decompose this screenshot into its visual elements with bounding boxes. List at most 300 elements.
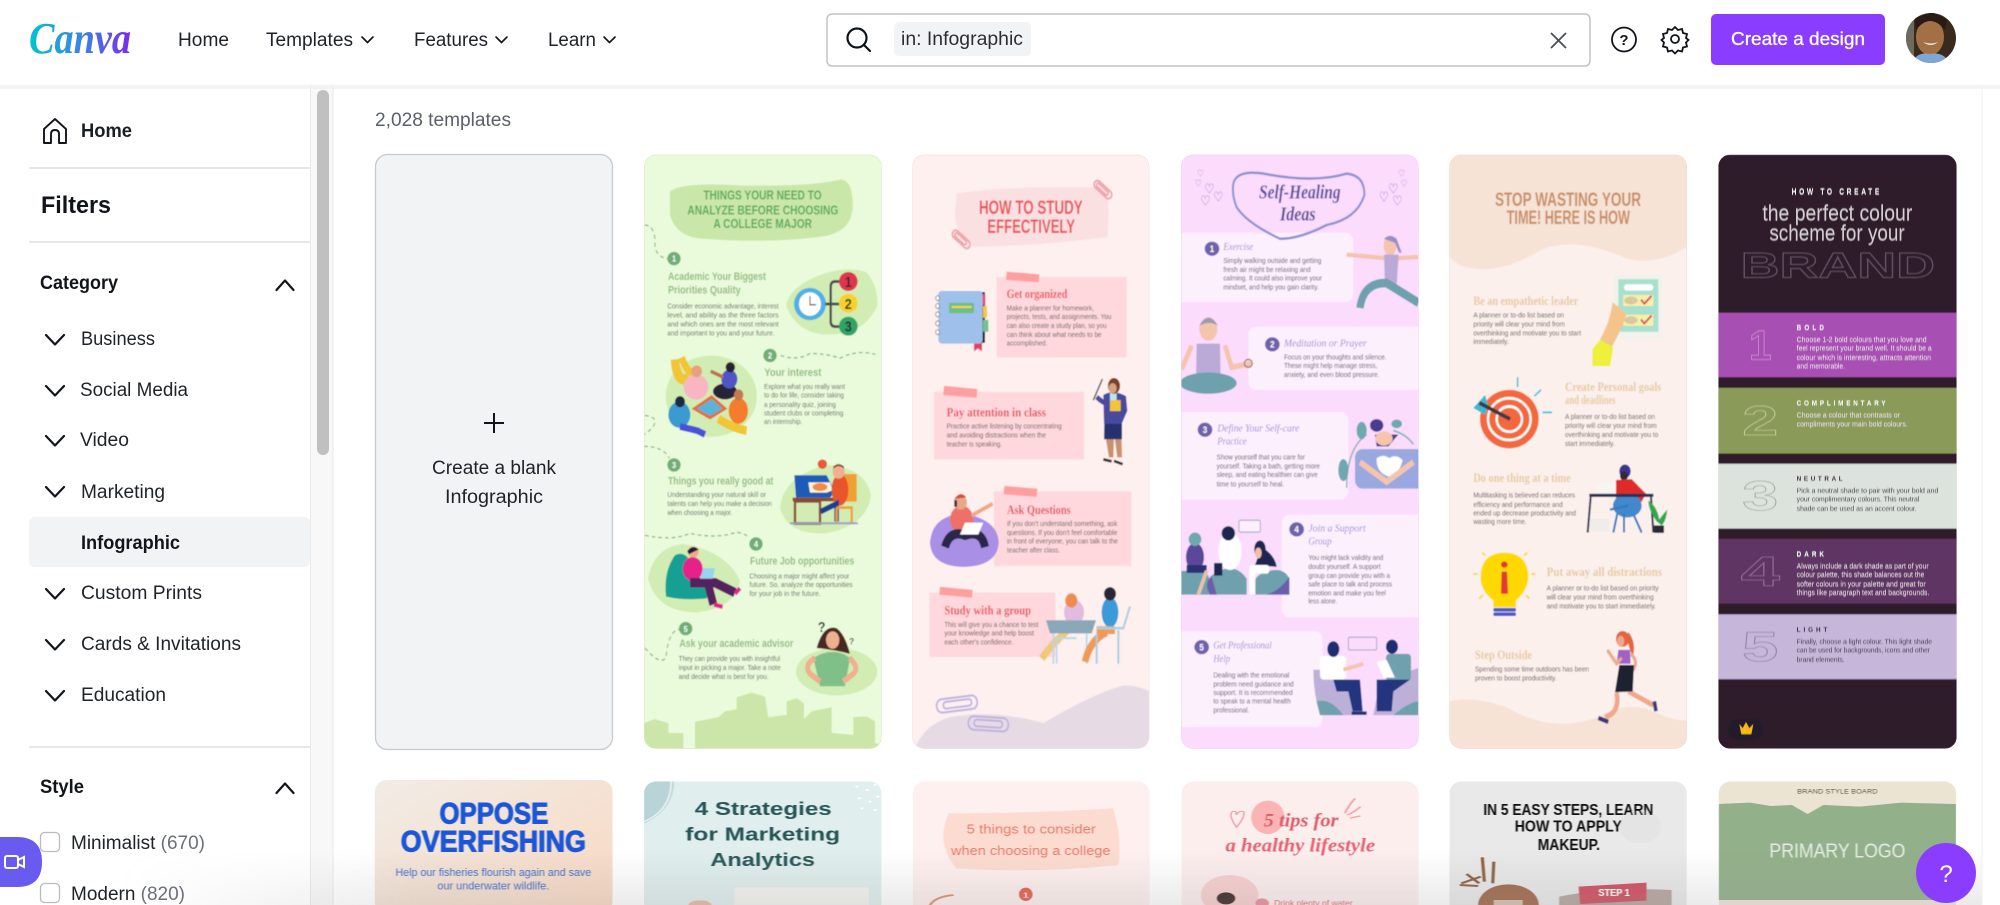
- heading: style: Style: [40, 777, 84, 798]
- icon: help: ?: [1619, 32, 1629, 49]
- illustration: meditation pose: [1180, 317, 1252, 394]
- idea 1: exercise: 1: [1210, 243, 1214, 254]
- illustration: student at a desk: [780, 459, 871, 533]
- tip: goals and deadlines: start immediately.: [1565, 441, 1615, 448]
- icon: camera: [5, 856, 24, 868]
- strip 2: complimentary: 2: [1742, 398, 1778, 445]
- title text: [687, 190, 838, 228]
- top navigation bar: [0, 13, 2000, 89]
- tip: step outside: Spending some time outdoors has been: [1475, 666, 1589, 674]
- strip 4: dark: softer colours in your palette and great for: [1797, 581, 1927, 588]
- idea 4: support group: doubt yourself. A support: [1308, 563, 1381, 571]
- title: scheme for your: [1769, 221, 1905, 246]
- card: brand style board: [1719, 781, 1956, 905]
- title: EFFECTIVELY: [987, 215, 1075, 237]
- tip: goals and deadlines: and deadlines: [1565, 392, 1616, 407]
- tip: goals and deadlines: priority will clear your mind from: [1565, 423, 1657, 430]
- card: oppose overfishing: our underwater wildlife.: [437, 879, 549, 892]
- bottom fade overlay: [0, 850, 1982, 905]
- icon: light bulb: [1473, 553, 1535, 616]
- logo: Canva: Canva: [29, 14, 131, 63]
- skyline: [644, 693, 882, 749]
- tip: step outside: proven to boost productivity.: [1475, 675, 1557, 683]
- step 2: student clubs or completing: [764, 410, 843, 418]
- idea 4: support group: Join a Support: [1308, 523, 1366, 535]
- card: oppose overfishing: OPPOSE: [439, 797, 548, 830]
- step 2: [666, 349, 845, 437]
- step 2: Explore what you really want: [764, 384, 845, 391]
- tip: study with a group: [929, 587, 1130, 664]
- illustration: two students at a table: [1042, 587, 1130, 664]
- hearts: ♡: [1392, 193, 1402, 209]
- idea 5: professional help: support. It is recommended: [1213, 690, 1293, 697]
- idea 2: meditation: [1180, 317, 1387, 394]
- idea 5: professional help: Get Professional: [1213, 640, 1272, 652]
- sidebar: filters: [29, 119, 310, 905]
- icon: checklist in hand: [1592, 274, 1663, 366]
- idea 5: professional help: [1194, 637, 1419, 715]
- hearts: ♡: [1398, 169, 1405, 180]
- dashed connectors: [644, 225, 875, 660]
- idea 4: support group: safe place to talk and process: [1308, 581, 1392, 589]
- tip: one thing at a time: efficiency and performance and: [1473, 501, 1563, 509]
- tip: study with a group: each other's confidence.: [944, 639, 1013, 647]
- title text: ANALYZE BEFORE CHOOSING: [687, 202, 838, 218]
- card: oppose overfishing: Help our fisheries flourish again and save: [396, 866, 591, 878]
- tip: pay attention: [934, 378, 1127, 464]
- idea 2: meditation: Meditation or Prayer: [1283, 338, 1367, 350]
- tip: get organized: can think about what needs to be: [1007, 331, 1102, 339]
- title: the perfect colour: [1762, 201, 1913, 226]
- idea 5: professional help: professional.: [1213, 707, 1249, 715]
- idea 1: exercise: mindset, and help you gain clarity.: [1223, 284, 1319, 292]
- card: choosing a college: 1: [1023, 891, 1029, 900]
- filter: infographic selected: [29, 517, 310, 567]
- step 1: Priorities Quality: [668, 285, 741, 297]
- idea 3: self-care practice: time to yourself to heal.: [1217, 481, 1284, 488]
- title: Ideas: [1279, 203, 1316, 225]
- idea 4: support group: You might lack validity and: [1308, 555, 1383, 562]
- title: HOW TO CREATE: [1792, 187, 1879, 197]
- card: apply makeup: IN 5 EASY STEPS, LEARN: [1483, 802, 1653, 819]
- strip 2: complimentary: Choose a colour that contrasts or: [1797, 412, 1901, 420]
- step 4: [648, 537, 855, 612]
- nav item: Learn: Learn: [548, 30, 596, 51]
- strip 3: neutral: NEUTRAL: [1797, 476, 1843, 483]
- icon: clock with priorities: 2: [845, 295, 852, 312]
- strip 5: light: brand elements.: [1797, 656, 1845, 664]
- title: [951, 179, 1113, 250]
- badge: crown: [1728, 719, 1763, 740]
- tip: ask questions: If you don't understand something, ask: [1007, 521, 1118, 528]
- step 3: talents can help you make a decision: [667, 501, 772, 508]
- strip 1: bold: [1718, 313, 1957, 377]
- idea 3: self-care practice: [1198, 419, 1432, 489]
- tip: empathetic leader: immediately.: [1473, 339, 1509, 346]
- illustration: self-hug: [1338, 418, 1419, 490]
- illustration: student on a beanbag: [930, 494, 999, 567]
- strip 1: bold: and memorable.: [1797, 363, 1845, 371]
- strip 4: dark: 4: [1741, 549, 1781, 596]
- step 5: They can provide you with insightful: [679, 656, 780, 663]
- step 4: 4: [754, 540, 759, 549]
- illustration: group talking: [1181, 520, 1289, 595]
- tip: step outside: [1475, 631, 1656, 722]
- idea 5: professional help: Help: [1212, 653, 1230, 665]
- template count: 2,028 templates: [375, 110, 511, 131]
- strip 4: dark: colour palette, this shade balances out the: [1797, 572, 1925, 579]
- tip: get organized: projects, tests, and assignments. You: [1007, 314, 1111, 321]
- idea 3: self-care practice: yourself. Taking a bath, getting more: [1217, 463, 1320, 471]
- strip 3: neutral: your complimentary colours. This neutral: [1797, 496, 1920, 504]
- nav item: Templates: Templates: [266, 30, 353, 51]
- heading: style: [40, 777, 294, 798]
- strip 1: bold: colour which is interesting, attracts attention: [1797, 354, 1931, 362]
- tip: study with a group: your knowledge and help boost: [944, 630, 1034, 638]
- icon: plus: [484, 413, 504, 433]
- illustration: yoga lunge: [1347, 236, 1419, 308]
- tip: goals and deadlines: A planner or to-do list based on: [1565, 414, 1655, 421]
- step 3: [666, 458, 871, 533]
- strip 3: neutral: Pick a neutral shade to pair with your bold and: [1797, 488, 1939, 495]
- step 1: and which ones are the most relevant: [667, 321, 779, 329]
- tip: pay attention: Practice active listening by concentrating: [947, 423, 1062, 431]
- idea 1: exercise: [1205, 236, 1419, 308]
- card: college major infographic: [644, 155, 882, 749]
- illustration: woman on a beanbag with laptop: [648, 544, 740, 612]
- button: create a design: [1711, 14, 1885, 65]
- tip: ask questions: [930, 486, 1131, 567]
- title: BRAND: [1741, 246, 1935, 285]
- illustration: woman with question marks: [796, 618, 877, 695]
- step 5: input in picking a major. Take a note: [679, 665, 781, 672]
- card: oppose overfishing: OVERFISHING: [401, 825, 586, 858]
- idea 2: meditation: 2: [1270, 339, 1275, 350]
- category filter list: [29, 273, 310, 706]
- filter: marketing: Marketing: [81, 482, 165, 503]
- tip: put away distractions: and motivate you to start immediately.: [1547, 603, 1656, 611]
- tip: empathetic leader: A planner or to-do list based on: [1473, 312, 1564, 320]
- filter: custom prints: Custom Prints: [81, 583, 202, 604]
- strip 1: bold: BOLD: [1797, 325, 1824, 332]
- style filter list: [40, 777, 294, 905]
- nav item: Home: Home: [178, 30, 229, 51]
- illustration: teacher: [1093, 378, 1127, 464]
- icon: home: [44, 119, 66, 143]
- idea 2: meditation: These might help manage stress,: [1284, 363, 1377, 370]
- illustration: runner: [1598, 631, 1656, 722]
- user avatar: [1906, 12, 1956, 64]
- card: brand style board: BRAND STYLE BOARD: [1797, 787, 1878, 795]
- tip: put away distractions: A planner or to-do list based on priority: [1547, 585, 1659, 593]
- search chip: in: Infographic: [901, 29, 1023, 50]
- card: marketing analytics: for Marketing: [685, 824, 840, 845]
- icon: search: [848, 28, 870, 51]
- title blob: [670, 180, 853, 241]
- icon: clock with priorities: 3: [845, 318, 852, 335]
- title: [1495, 188, 1641, 229]
- tip: step outside: Step Outside: [1475, 647, 1533, 662]
- strip 3: neutral: [1718, 464, 1957, 529]
- tip: ask questions: questions. If you don't feel comfortable: [1007, 529, 1117, 537]
- strip 5: light: [1718, 614, 1957, 679]
- icon: notebook: [936, 291, 988, 351]
- illustration: woman with question marks: ?: [818, 618, 826, 635]
- tip: empathetic leader: [1473, 274, 1663, 366]
- idea 5: professional help: to speak to a mental health: [1213, 698, 1291, 706]
- tip: pay attention: and avoiding distractions when the: [947, 432, 1046, 439]
- tip: get organized: [936, 272, 1127, 357]
- strip 5: light: Finally, choose a light colour. This light shade: [1797, 639, 1932, 646]
- strip 1: bold: Choose 1-2 bold colours that you love and: [1797, 337, 1927, 344]
- title text: A COLLEGE MAJOR: [713, 216, 812, 231]
- card: self-healing ideas: [1173, 155, 1432, 749]
- icon: target with arrow: [1473, 377, 1552, 448]
- strip 5: light: LIGHT: [1797, 627, 1828, 634]
- strip 4: dark: things like paragraph text and backgrounds.: [1797, 590, 1930, 597]
- bottom wave with paperclips: [915, 686, 1149, 749]
- strip 5: light: 5: [1742, 624, 1778, 671]
- step 1: and important to you and your future.: [667, 330, 775, 337]
- button: create a design: Create a design: [1731, 29, 1865, 49]
- tip: get organized: accomplished.: [1007, 340, 1047, 348]
- strip 5: light: can be used for backgrounds, icons and other: [1797, 647, 1931, 655]
- tip: get organized: can also create a study plan, so you: [1007, 323, 1107, 330]
- step 4: Future Job opportunities: [750, 556, 855, 568]
- strip 3: neutral: 3: [1742, 473, 1778, 520]
- step 2: a personality quiz, joining: [764, 401, 836, 409]
- step 2: an internship.: [764, 418, 802, 426]
- illustration: man at desk with plant: [1588, 465, 1667, 533]
- step 4: Choosing a major might affect your: [749, 573, 850, 581]
- card: marketing analytics: 4 Strategies: [695, 799, 832, 820]
- hearts: ♡: [1197, 169, 1204, 180]
- title: Self-Healing: [1259, 181, 1341, 203]
- tip: goals and deadlines: [1473, 377, 1662, 448]
- step 1: Consider economic advantage, interest: [667, 303, 779, 311]
- strip 4: dark: [1718, 539, 1957, 604]
- filter: infographic selected: Infographic: [81, 533, 180, 554]
- hearts: ♡: [1213, 188, 1223, 205]
- heading: category: Category: [40, 273, 118, 294]
- card: create a blank infographic: [376, 154, 612, 750]
- tip: one thing at a time: Do one thing at a time: [1473, 470, 1571, 485]
- tip: put away distractions: will clear your mind from overthinking: [1546, 594, 1654, 602]
- card: stop wasting your time: [1449, 155, 1687, 749]
- hearts: ♡: [1379, 188, 1389, 205]
- step 3: Understanding your natural skill or: [667, 492, 767, 499]
- search box: [827, 14, 1590, 66]
- card: apply makeup: HOW TO APPLY: [1515, 819, 1622, 835]
- strip 2: complimentary: COMPLIMENTARY: [1797, 400, 1886, 408]
- hearts: ♡: [1388, 180, 1398, 197]
- heading: filters: Filters: [41, 192, 111, 219]
- idea 3: self-care practice: sleep, and eating healthier can give: [1217, 472, 1318, 479]
- icon: clock with priorities: 1: [845, 273, 852, 290]
- option: modern: Modern (820): [71, 884, 185, 905]
- title: HOW TO STUDY: [979, 196, 1083, 218]
- illustration: students playing a board game: [666, 355, 757, 437]
- tip: pay attention: teacher is speaking.: [947, 441, 1002, 449]
- tip: empathetic leader: overthinking and motivate you to start: [1473, 330, 1581, 338]
- tip: ask questions: teacher after class.: [1007, 547, 1060, 554]
- step 5: 5: [684, 624, 688, 634]
- button: video recording: [0, 837, 42, 887]
- tip: study with a group: This will give you a chance to test: [944, 622, 1038, 629]
- hearts: ♡: [1204, 180, 1214, 197]
- strip 2: complimentary: [1718, 388, 1957, 453]
- card: perfect colour scheme for your brand: [1718, 155, 1957, 749]
- card: oppose overfishing: [375, 780, 613, 905]
- filter: cards and invitations: Cards & Invitations: [81, 634, 241, 655]
- card: healthy lifestyle: 5 tips for: [1264, 809, 1339, 831]
- filter: education: Education: [81, 685, 166, 706]
- idea 2: meditation: Focus on your thoughts and silence.: [1284, 354, 1387, 362]
- title: STOP WASTING YOUR: [1495, 188, 1641, 210]
- hearts: ♡: [1195, 179, 1202, 190]
- filter: business: Business: [81, 329, 155, 350]
- step 5: Ask your academic advisor: [679, 639, 793, 650]
- icon: paperclips: [951, 179, 1113, 250]
- tip: one thing at a time: Multitasking is believed can reduces: [1473, 492, 1575, 500]
- tip: get organized: Make a planner for homework,: [1007, 305, 1094, 313]
- idea 4: support group: [1181, 520, 1392, 606]
- row two: right templates: [1182, 781, 1956, 905]
- card: apply makeup: MAKEUP.: [1538, 837, 1600, 854]
- panels: [1173, 233, 1428, 727]
- tip: put away distractions: [1473, 553, 1662, 616]
- card: choosing a college: [913, 781, 1150, 905]
- idea 4: support group: less alone.: [1308, 598, 1337, 606]
- nav item: Features: Features: [414, 30, 488, 51]
- strip 1: bold: 1: [1749, 323, 1772, 369]
- step 2: 2: [768, 351, 773, 361]
- card: healthy lifestyle: a healthy lifestyle: [1226, 834, 1375, 856]
- idea 5: professional help: problem need guidance and: [1213, 681, 1294, 688]
- hearts: [1195, 169, 1408, 209]
- card: how to study effectively: [912, 155, 1149, 749]
- strip 4: dark: DARK: [1797, 551, 1824, 559]
- icon: clock with priorities: [786, 269, 877, 336]
- title: TIME! HERE IS HOW: [1507, 206, 1631, 229]
- card: healthy lifestyle: [1182, 781, 1418, 905]
- idea 3: self-care practice: Show yourself that you care for: [1217, 454, 1306, 462]
- button: help: ?: [1939, 861, 1953, 888]
- idea 3: self-care practice: 3: [1203, 424, 1207, 435]
- option: minimalist: Minimalist (670): [71, 833, 205, 854]
- hearts: ♡: [1200, 193, 1210, 209]
- heading: category: [40, 273, 294, 294]
- card: marketing analytics: [644, 781, 881, 905]
- title: [1195, 169, 1408, 239]
- tip: ask questions: in front of everyone, you can talk to the: [1007, 538, 1118, 546]
- label: create a blank: Create a blank: [432, 458, 556, 479]
- idea 4: support group: emotion and make you feel: [1308, 590, 1386, 598]
- icon: clear: [1551, 33, 1566, 48]
- card: choosing a college: 5 things to consider: [967, 822, 1096, 836]
- idea 4: support group: 4: [1294, 524, 1299, 535]
- step 3: when choosing a major.: [666, 510, 732, 517]
- tip: ask questions: Ask Questions: [1007, 504, 1071, 517]
- button: help: [1916, 843, 1976, 903]
- page right edge: [1981, 85, 1983, 905]
- step 2: to do for life, consider taking: [764, 392, 844, 400]
- step 3: 3: [672, 461, 677, 470]
- tip: goals and deadlines: overthinking and motivate you to: [1565, 431, 1658, 439]
- idea 4: support group: Group: [1308, 536, 1332, 548]
- card: choosing a college: when choosing a college: [950, 844, 1111, 858]
- idea 1: exercise: fresh air might be relaxing and: [1223, 267, 1311, 274]
- idea 5: professional help: Dealing with the emotional: [1213, 672, 1290, 680]
- strip 1: bold: feel represent your brand well. It should be a: [1797, 345, 1932, 353]
- step 1: Academic Your Biggest: [668, 271, 767, 283]
- tip: pay attention: Pay attention in class: [947, 407, 1047, 420]
- hearts: ♡: [1400, 179, 1408, 190]
- step 2: Your interest: [764, 367, 822, 379]
- top wave header: [1449, 155, 1687, 269]
- scrollbar gutter: [310, 85, 333, 905]
- idea 4: support group: group can provide you with a: [1308, 573, 1390, 580]
- illustration: counselling session: [1313, 637, 1419, 715]
- step 3: Things you really good at: [668, 476, 774, 488]
- filter: social media: Social Media: [80, 380, 188, 401]
- idea 3: self-care practice: Practice: [1216, 436, 1247, 448]
- idea 1: exercise: Exercise: [1222, 241, 1254, 253]
- idea 3: self-care practice: Define Your Self-care: [1216, 423, 1300, 435]
- sidebar home item: [44, 119, 132, 143]
- idea 1: exercise: calming. It could also improve your: [1223, 275, 1323, 283]
- tip: get organized: Get organized: [1007, 288, 1068, 301]
- title text: THINGS YOUR NEED TO: [703, 187, 822, 203]
- step 5: and decide what is best for you.: [679, 673, 769, 681]
- idea 5: professional help: 5: [1199, 642, 1204, 652]
- title: [1741, 187, 1935, 285]
- card: apply makeup: [1449, 781, 1687, 905]
- card: marketing analytics: Analytics: [710, 850, 815, 871]
- tip: one thing at a time: [1472, 465, 1667, 533]
- step 1: level, and ability as the three factors: [667, 312, 779, 320]
- tip: one thing at a time: wasting more time.: [1472, 519, 1527, 526]
- scrollbar thumb: [317, 90, 329, 455]
- tip: empathetic leader: priority will clear your mind from: [1473, 321, 1565, 329]
- bottom wave: [1449, 699, 1687, 749]
- strip 4: dark: Always include a dark shade as part of your: [1797, 563, 1929, 571]
- icon: help: [1612, 28, 1636, 52]
- tip: one thing at a time: ended up decrease productivity and: [1473, 510, 1576, 518]
- row two: left templates: [375, 780, 1150, 905]
- step 5: [679, 618, 877, 695]
- tip: goals and deadlines: Create Personal goals: [1565, 379, 1662, 394]
- tip: study with a group: Study with a group: [944, 605, 1031, 618]
- strip 2: complimentary: compliments your main bold colours.: [1797, 421, 1908, 429]
- idea 1: exercise: Simply walking outside and getting: [1223, 258, 1321, 265]
- step 4: future. So, analyze the opportunities: [749, 582, 853, 589]
- icon: settings gear: [1662, 27, 1688, 54]
- strip 3: neutral: shade can be used as an accent colour.: [1797, 505, 1917, 513]
- step 4: for your job in the future.: [749, 591, 821, 598]
- search chip: [894, 22, 1031, 56]
- label: infographic: Infographic: [445, 487, 543, 508]
- idea 2: meditation: anxiety, and even blood pressure.: [1284, 371, 1379, 379]
- sidebar home item: Home: [81, 121, 132, 142]
- card: apply makeup: STEP 1: [1598, 887, 1630, 898]
- tip: empathetic leader: Be an empathetic leader: [1473, 293, 1579, 308]
- step 1: [667, 252, 877, 337]
- tip: put away distractions: Put away all distractions: [1547, 564, 1662, 579]
- step 1: 1: [672, 254, 677, 264]
- filter: video: Video: [80, 430, 129, 451]
- illustration: woman with question marks: ?: [849, 636, 854, 647]
